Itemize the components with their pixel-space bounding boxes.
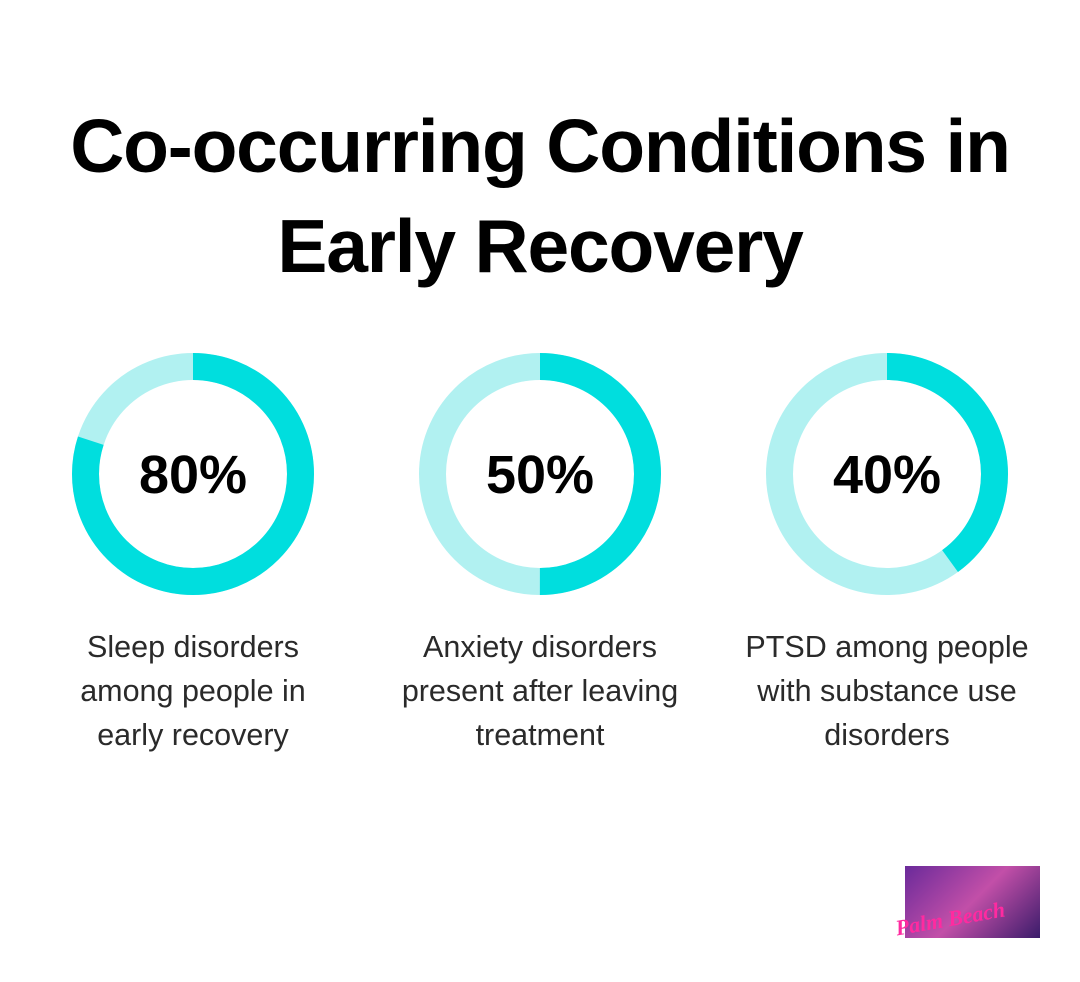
label: ptsd: disorders	[824, 718, 950, 752]
label: sleep	[80, 630, 306, 752]
label: ptsd: with substance use	[757, 674, 1017, 708]
donut: 80%	[86, 366, 300, 582]
label: ptsd	[745, 630, 1029, 752]
label: anxiety: Anxiety disorders	[423, 630, 657, 664]
label: anxiety: present after leaving	[402, 674, 678, 708]
label: ptsd: PTSD among people	[745, 630, 1029, 664]
donut: 50%	[432, 366, 648, 582]
label: sleep: Sleep disorders	[87, 630, 299, 664]
label: anxiety: treatment	[476, 718, 604, 752]
donut: 80%: 80%	[139, 445, 247, 505]
logo: Palm Beach	[894, 897, 1007, 940]
donut: 40%: 40%	[833, 445, 941, 505]
title	[70, 104, 1010, 288]
title: Co-occurring Conditions in	[70, 104, 1010, 188]
donut: 40%	[780, 366, 994, 582]
logo	[905, 866, 1040, 938]
title: Early Recovery	[277, 204, 803, 288]
label: anxiety	[402, 630, 678, 752]
label: sleep: early recovery	[97, 718, 289, 752]
donut: 50%: 50%	[486, 445, 594, 505]
label: sleep: among people in	[80, 674, 306, 708]
